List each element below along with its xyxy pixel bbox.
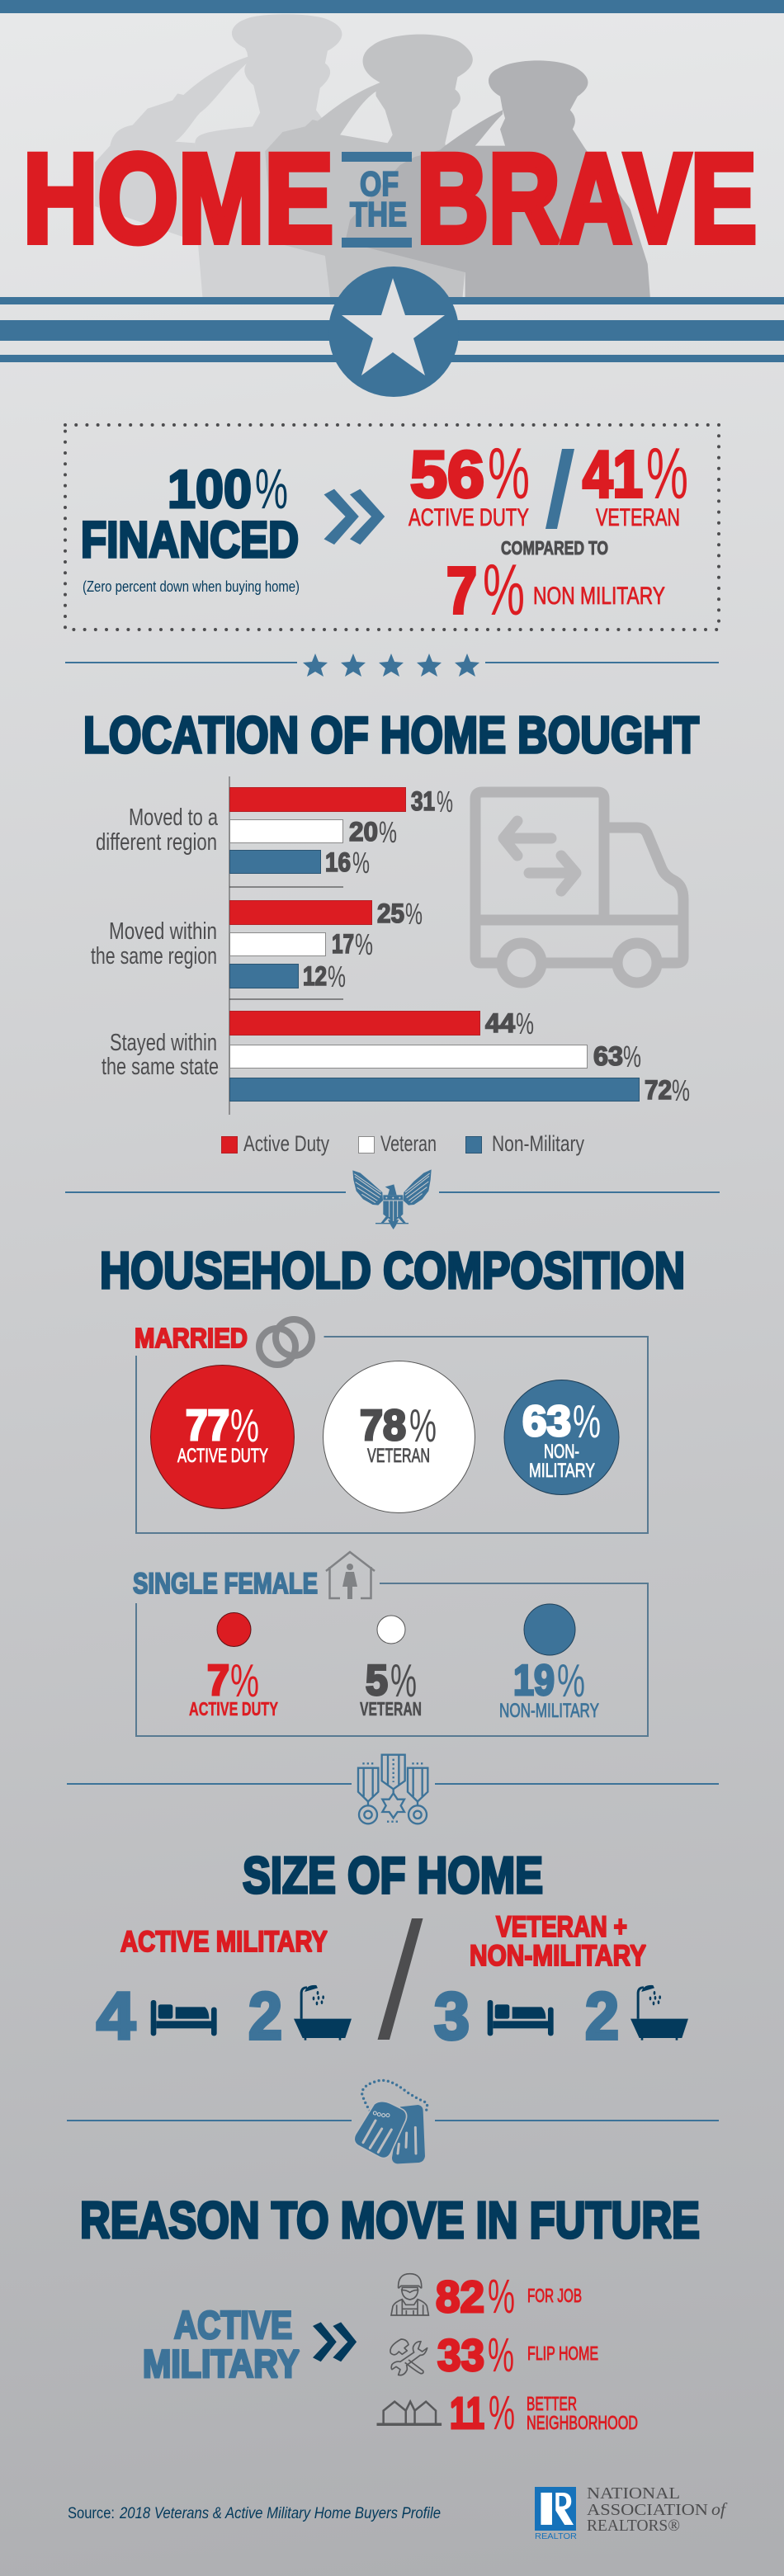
category: same region: % xyxy=(405,897,423,931)
stat: 56% active duty xyxy=(409,432,530,531)
size comparison: veteran and non-military xyxy=(434,1911,688,2054)
circle: active duty 77%: 77 xyxy=(186,1402,229,1450)
category: same region xyxy=(91,897,423,993)
icon: dog tags xyxy=(354,2080,427,2163)
circle: veteran 78%: % xyxy=(409,1399,437,1452)
stat: 82% for job: 82 xyxy=(436,2272,484,2322)
stat: non-military 19%: 19 xyxy=(513,1657,555,1705)
category: different region: 20 xyxy=(349,817,378,847)
stat: 82% for job: % xyxy=(488,2270,515,2324)
size comparison: active military: ACTIVE MILITARY xyxy=(120,1926,328,1958)
category: same region: Moved within xyxy=(109,918,217,945)
icon: wrench and screwdriver xyxy=(390,2339,427,2375)
stat: 7% non military: NON MILITARY xyxy=(533,583,665,610)
stat: 11% better neighborhood: BETTER xyxy=(527,2393,577,2414)
size comparison: active military: 2 xyxy=(248,1979,282,2054)
category: different region: 16 xyxy=(325,847,351,877)
divider with stars xyxy=(65,653,719,677)
circle: non-military 63%: NON- xyxy=(544,1441,579,1463)
stat: 33% flip home xyxy=(437,2328,598,2382)
size comparison: veteran and non-military: NON-MILITARY xyxy=(470,1940,646,1972)
panel: married xyxy=(135,1319,648,1533)
size comparison: active military: 4 xyxy=(97,1979,135,2054)
chart legend: Veteran xyxy=(380,1131,437,1156)
logo: National Association of Realtors: REALTOR xyxy=(535,2532,577,2541)
bar chart: location xyxy=(91,776,690,1115)
category: same region: 25 xyxy=(377,899,404,928)
logo: National Association of Realtors: REALTORS® xyxy=(587,2517,680,2535)
compared to label: COMPARED TO xyxy=(501,537,608,559)
stat: 7% non military: % xyxy=(483,549,525,630)
category: same state: Stayed within xyxy=(110,1030,217,1056)
category: same state xyxy=(102,1007,690,1107)
stat: 41% veteran: VETERAN xyxy=(596,504,680,531)
icon: bed xyxy=(488,2000,554,2036)
category: different region: different region xyxy=(96,829,217,856)
size comparison: veteran and non-military: 3 xyxy=(434,1979,470,2054)
source note: 2018 Veterans & Active Military Home Buyers Profile xyxy=(119,2505,441,2522)
stat: 11% better neighborhood: % xyxy=(489,2386,515,2440)
title connector: OF THE: OF xyxy=(360,164,399,203)
stat: 7% non military: 7 xyxy=(446,554,477,627)
stat: non-military 19% xyxy=(499,1604,599,1722)
circle: active duty 77%: ACTIVE DUTY xyxy=(177,1445,268,1467)
divider lines by medals xyxy=(67,1783,719,1785)
category: same region: the same region xyxy=(91,943,217,970)
category: same state: the same state xyxy=(102,1054,219,1080)
stat: 41% veteran: 41 xyxy=(583,437,643,511)
top band xyxy=(0,0,784,13)
category: same state: 63 xyxy=(593,1041,623,1071)
category: same state: 44 xyxy=(485,1008,515,1038)
stat: 100% financed xyxy=(81,457,300,595)
title connector: OF THE xyxy=(342,152,412,248)
chart legend: Non-Military xyxy=(492,1131,584,1156)
icon: eagle xyxy=(352,1169,432,1229)
stat: 56% active duty: ACTIVE DUTY xyxy=(409,504,529,531)
icon: medals xyxy=(358,1755,427,1823)
category: different region: % xyxy=(437,785,453,819)
arrow: double chevron xyxy=(313,2322,357,2361)
slash xyxy=(545,449,574,529)
size comparison: veteran and non-military: VETERAN + xyxy=(496,1911,627,1943)
icon: neighborhood houses xyxy=(376,2402,442,2424)
reason rows xyxy=(376,2270,638,2440)
logo: National Association of Realtors xyxy=(535,2484,728,2541)
category: same region: % xyxy=(328,960,346,993)
source note: Source: xyxy=(68,2505,115,2522)
stat: 82% for job xyxy=(436,2270,582,2324)
chart legend xyxy=(221,1131,584,1156)
stat: 56% active duty: 56 xyxy=(410,437,484,511)
circle: veteran 78% xyxy=(324,1361,475,1513)
stat: 100% financed: (Zero percent down when buying home) xyxy=(83,578,300,595)
size comparison: veteran and non-military: 2 xyxy=(585,1979,619,2054)
category: different region: 31 xyxy=(411,786,435,816)
stat: 100% financed: 100 xyxy=(168,459,252,519)
saluting soldiers silhouette xyxy=(95,14,650,297)
circle: non-military 63% xyxy=(504,1380,619,1495)
arrow: double chevron xyxy=(324,489,385,545)
logo: National Association of Realtors: ASSOCIATION xyxy=(587,2501,708,2519)
icon: bathtub xyxy=(631,1985,688,2041)
stat: veteran 5%: 5 xyxy=(366,1657,388,1705)
stripes with star emblem xyxy=(0,267,784,397)
circle: non-military 63%: % xyxy=(573,1395,601,1448)
category: same state: % xyxy=(516,1007,534,1040)
divider lines by eagle xyxy=(65,1191,720,1193)
icon: soldier xyxy=(391,2274,428,2315)
category: different region: % xyxy=(352,846,370,880)
stat: 11% better neighborhood: 11 xyxy=(450,2389,484,2438)
category: same region: % xyxy=(355,927,373,961)
size comparison: active military xyxy=(97,1926,352,2054)
stat: 100% financed: FINANCED xyxy=(81,512,299,568)
category: same region: 17 xyxy=(332,929,354,959)
stat: veteran 5% xyxy=(360,1616,422,1720)
divider lines by dog tags xyxy=(67,2120,719,2121)
stat: non-military 19%: % xyxy=(557,1654,585,1707)
stat: 11% better neighborhood: NEIGHBORHOOD xyxy=(527,2412,638,2433)
stat: active duty 7%: 7 xyxy=(207,1657,229,1705)
category: same state: % xyxy=(623,1040,641,1073)
stat: 11% better neighborhood xyxy=(450,2386,638,2440)
stat: non-military 19%: NON-MILITARY xyxy=(499,1700,599,1722)
stat: active duty 7% xyxy=(189,1612,278,1720)
icon: wedding rings xyxy=(259,1319,312,1365)
category: different region: % xyxy=(379,815,397,849)
circle: active duty 77%: % xyxy=(230,1399,259,1452)
circle: veteran 78%: 78 xyxy=(360,1402,406,1450)
stat: 33% flip home: 33 xyxy=(437,2331,484,2380)
logo: National Association of Realtors: NATIONAL xyxy=(587,2484,680,2503)
active military label: ACTIVE xyxy=(174,2303,292,2347)
stat: veteran 5%: % xyxy=(390,1654,417,1707)
category: same state: % xyxy=(672,1073,690,1107)
panel: financing xyxy=(65,425,719,630)
heading: household composition: HOUSEHOLD COMPOSITION xyxy=(100,1243,685,1300)
panel: single female xyxy=(133,1552,648,1736)
slash divider xyxy=(378,1918,423,2040)
title xyxy=(23,128,757,269)
married label: MARRIED xyxy=(135,1323,248,1353)
stat: veteran 5%: VETERAN xyxy=(360,1698,422,1720)
circle: veteran 78%: VETERAN xyxy=(367,1445,430,1467)
stat: 33% flip home: FLIP HOME xyxy=(527,2342,598,2364)
category: different region: Moved to a xyxy=(129,804,219,831)
category: different region xyxy=(96,785,453,880)
logo: National Association of Realtors: of xyxy=(711,2499,728,2519)
title connector: OF THE: THE xyxy=(350,195,407,234)
category: same region: 12 xyxy=(303,961,327,991)
stat: 100% financed: % xyxy=(255,457,288,521)
circle: non-military 63%: MILITARY xyxy=(529,1460,595,1482)
heading: size of home: SIZE OF HOME xyxy=(243,1847,543,1904)
icon: moving truck xyxy=(475,792,683,983)
active military label xyxy=(143,2303,300,2385)
chart legend: Active Duty xyxy=(243,1131,329,1156)
stat: 82% for job: FOR JOB xyxy=(527,2285,582,2306)
circle: non-military 63%: 63 xyxy=(522,1398,571,1446)
stat: 7% non military xyxy=(446,549,665,630)
stat: 41% veteran xyxy=(583,432,688,531)
stat: active duty 7%: % xyxy=(230,1654,259,1707)
stat: 41% veteran: % xyxy=(646,432,688,514)
icon: woman in house xyxy=(326,1552,375,1599)
stat: 56% active duty: % xyxy=(488,432,530,514)
active military label: MILITARY xyxy=(143,2342,300,2385)
single female label: SINGLE FEMALE xyxy=(133,1568,318,1600)
stat: 33% flip home: % xyxy=(488,2328,514,2382)
icon: bed xyxy=(151,2000,217,2036)
stat: active duty 7%: ACTIVE DUTY xyxy=(189,1698,278,1720)
title word: HOME: HOME xyxy=(23,128,333,269)
category: same state: 72 xyxy=(645,1075,672,1105)
icon: bathtub xyxy=(294,1985,352,2041)
circle: active duty 77% xyxy=(150,1365,294,1508)
